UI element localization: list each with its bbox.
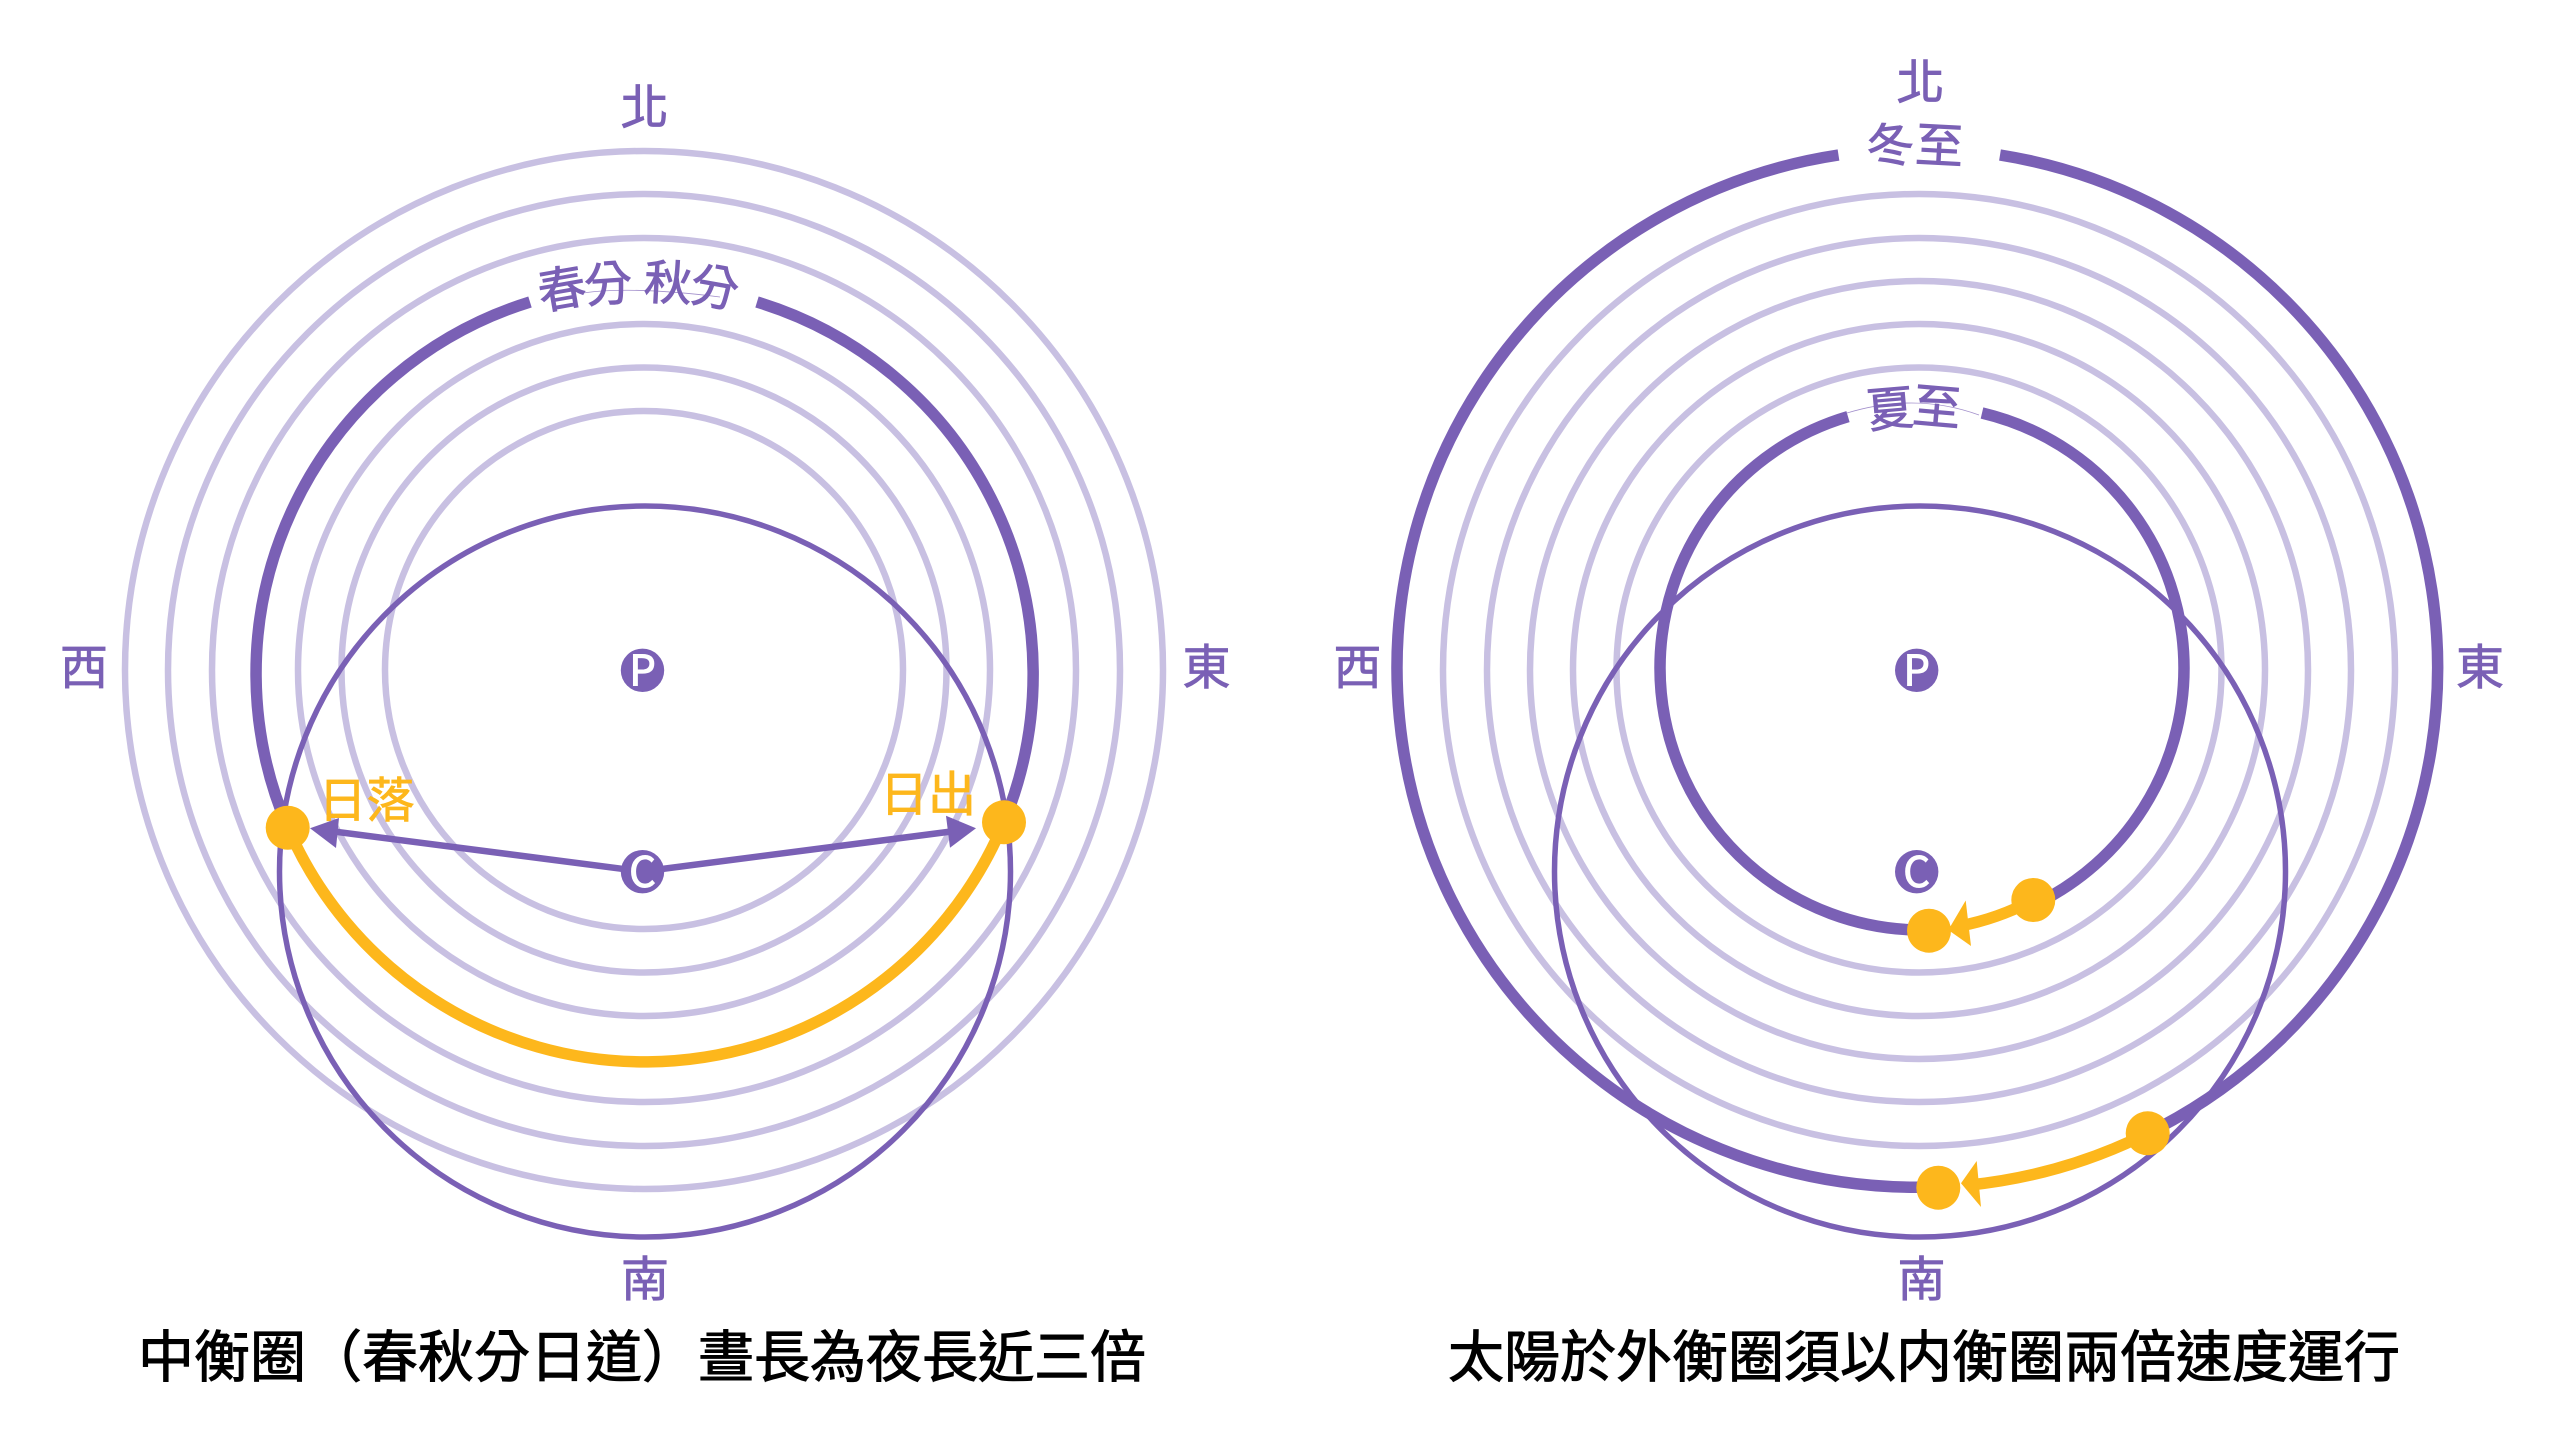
- direction: west: 西: [1333, 628, 1382, 698]
- arrow: sun motion on outer ring: [1961, 1133, 2148, 1207]
- label: 春分 秋分: 春: [531, 246, 591, 324]
- label: 夏至: 夏: [1863, 368, 1917, 442]
- arrow: observer to sunset: [310, 818, 642, 872]
- observer marker C: [621, 839, 664, 900]
- label: 冬至: 至: [1914, 105, 1965, 178]
- arrow: sun motion on inner ring: [1948, 900, 2033, 946]
- concentric heng rings: [1443, 194, 2395, 1146]
- direction: south: 南: [621, 1240, 669, 1310]
- label: 夏至: 至: [1910, 366, 1964, 440]
- label: 春分 秋分: 分: [581, 243, 634, 317]
- label: 春分 秋分: [531, 243, 745, 324]
- caption: solstice: 太陽於外衡圈須以内衡圈兩倍速度運行: [1448, 1313, 2400, 1394]
- daytime sun path arc: [288, 822, 1004, 1062]
- label: 夏至: [1847, 366, 1979, 442]
- label: 春分 秋分: 分: [686, 245, 745, 322]
- direction: north: 北: [621, 68, 669, 138]
- direction: east: 東: [1182, 628, 1231, 698]
- direction: west: 西: [60, 628, 108, 698]
- sun at sunset: [266, 806, 310, 850]
- direction: east: 東: [2456, 628, 2504, 698]
- label: 日落: 日落: [318, 761, 415, 831]
- observer marker C: [1895, 839, 1938, 900]
- observer's visible sky circle: [280, 506, 1010, 1237]
- panel: solstice diagram: [1333, 43, 2504, 1394]
- label: 冬至: [1862, 104, 1965, 179]
- label: 春分 秋分: 秋: [642, 243, 694, 315]
- direction: north: 北: [1896, 43, 1945, 113]
- suns on outer ring: [1916, 1111, 2170, 1210]
- panel: equinox diagram: [60, 68, 1231, 1394]
- pole marker P: [1895, 638, 1938, 698]
- observer marker C: C: [629, 839, 656, 900]
- outer heng ring, winter solstice path: [1397, 155, 2438, 1187]
- concentric heng rings: [125, 151, 1163, 1189]
- pole marker P: P: [1903, 638, 1930, 698]
- sun at sunrise: [982, 800, 1026, 844]
- observer's visible sky circle: [1554, 506, 2286, 1237]
- pole marker P: [621, 638, 664, 698]
- suns on inner ring: [1907, 878, 2055, 953]
- arrow: observer to sunrise: [642, 816, 976, 872]
- observer marker C: C: [1903, 839, 1930, 900]
- middle heng ring, equinox path: [256, 302, 1033, 828]
- label: 冬至: 冬: [1862, 104, 1918, 179]
- direction: south: 南: [1897, 1240, 1946, 1310]
- caption: equinox: 中衡圈（春秋分日道）晝長為夜長近三倍: [138, 1313, 1146, 1394]
- pole marker P: P: [629, 638, 656, 698]
- inner heng ring, summer solstice path: [1660, 413, 2184, 930]
- label: 日出: 日出: [880, 755, 976, 825]
